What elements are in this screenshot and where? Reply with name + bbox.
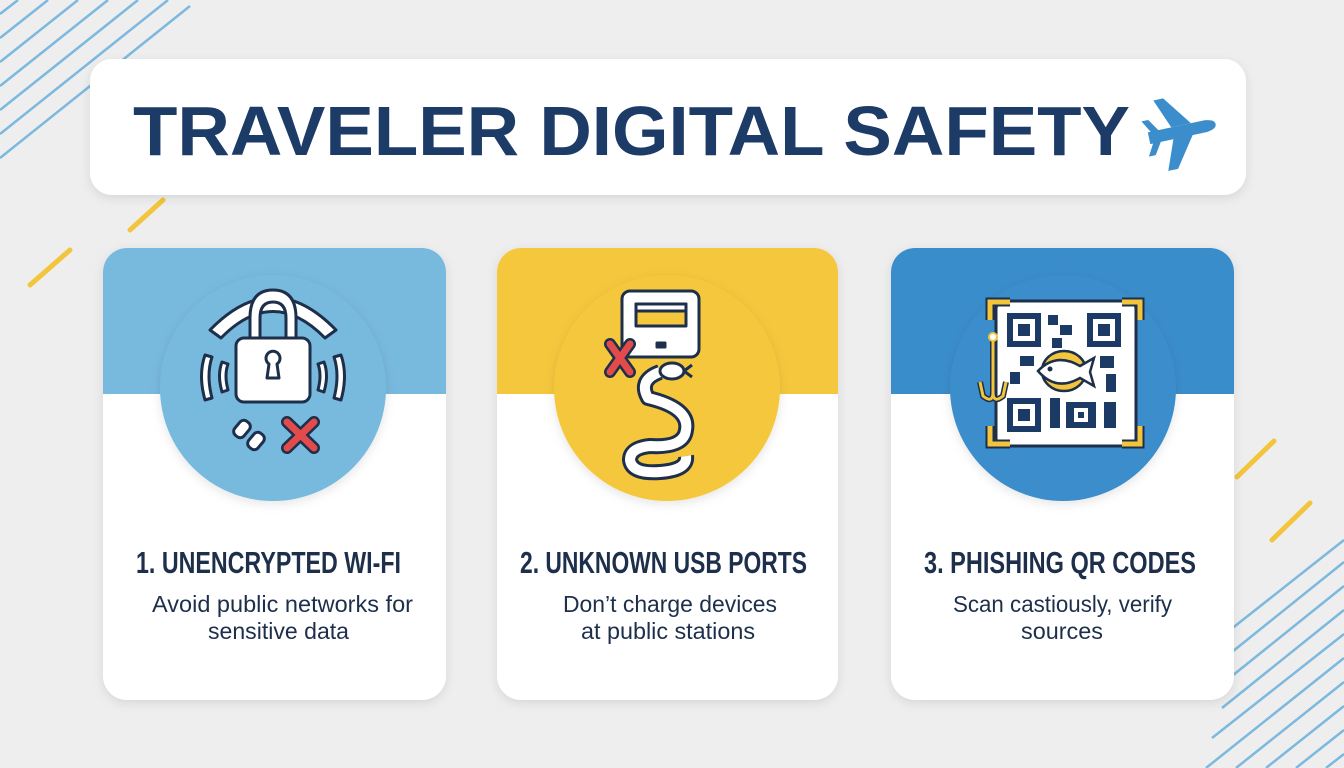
panel: unencrypted wifi bbox=[103, 248, 446, 700]
description: Avoid public networks for bbox=[152, 591, 413, 617]
panel: phishing qr codes bbox=[891, 248, 1234, 700]
panel: unknown usb ports bbox=[497, 248, 838, 700]
heading: 2. UNKNOWN USB PORTS bbox=[520, 545, 807, 580]
panel: unknown usb ports: at public stations bbox=[581, 618, 755, 644]
title banner bbox=[90, 59, 1246, 195]
description: Don’t charge devices bbox=[563, 591, 777, 617]
icon: qr code with hook and fish bbox=[980, 301, 1140, 446]
heading: 3. PHISHING QR CODES bbox=[924, 545, 1196, 580]
icon: lock wifi bbox=[202, 290, 344, 452]
heading: 1. UNENCRYPTED WI-FI bbox=[136, 545, 401, 580]
panel: phishing qr codes: sources bbox=[1021, 618, 1103, 644]
panel: unencrypted wifi: sensitive data bbox=[208, 618, 349, 644]
icon: airplane bbox=[1138, 89, 1223, 174]
description: Scan castiously, verify bbox=[953, 591, 1172, 617]
icon: usb port and snake bbox=[622, 291, 699, 472]
title: TRAVELER DIGITAL SAFETY bbox=[133, 92, 1130, 170]
